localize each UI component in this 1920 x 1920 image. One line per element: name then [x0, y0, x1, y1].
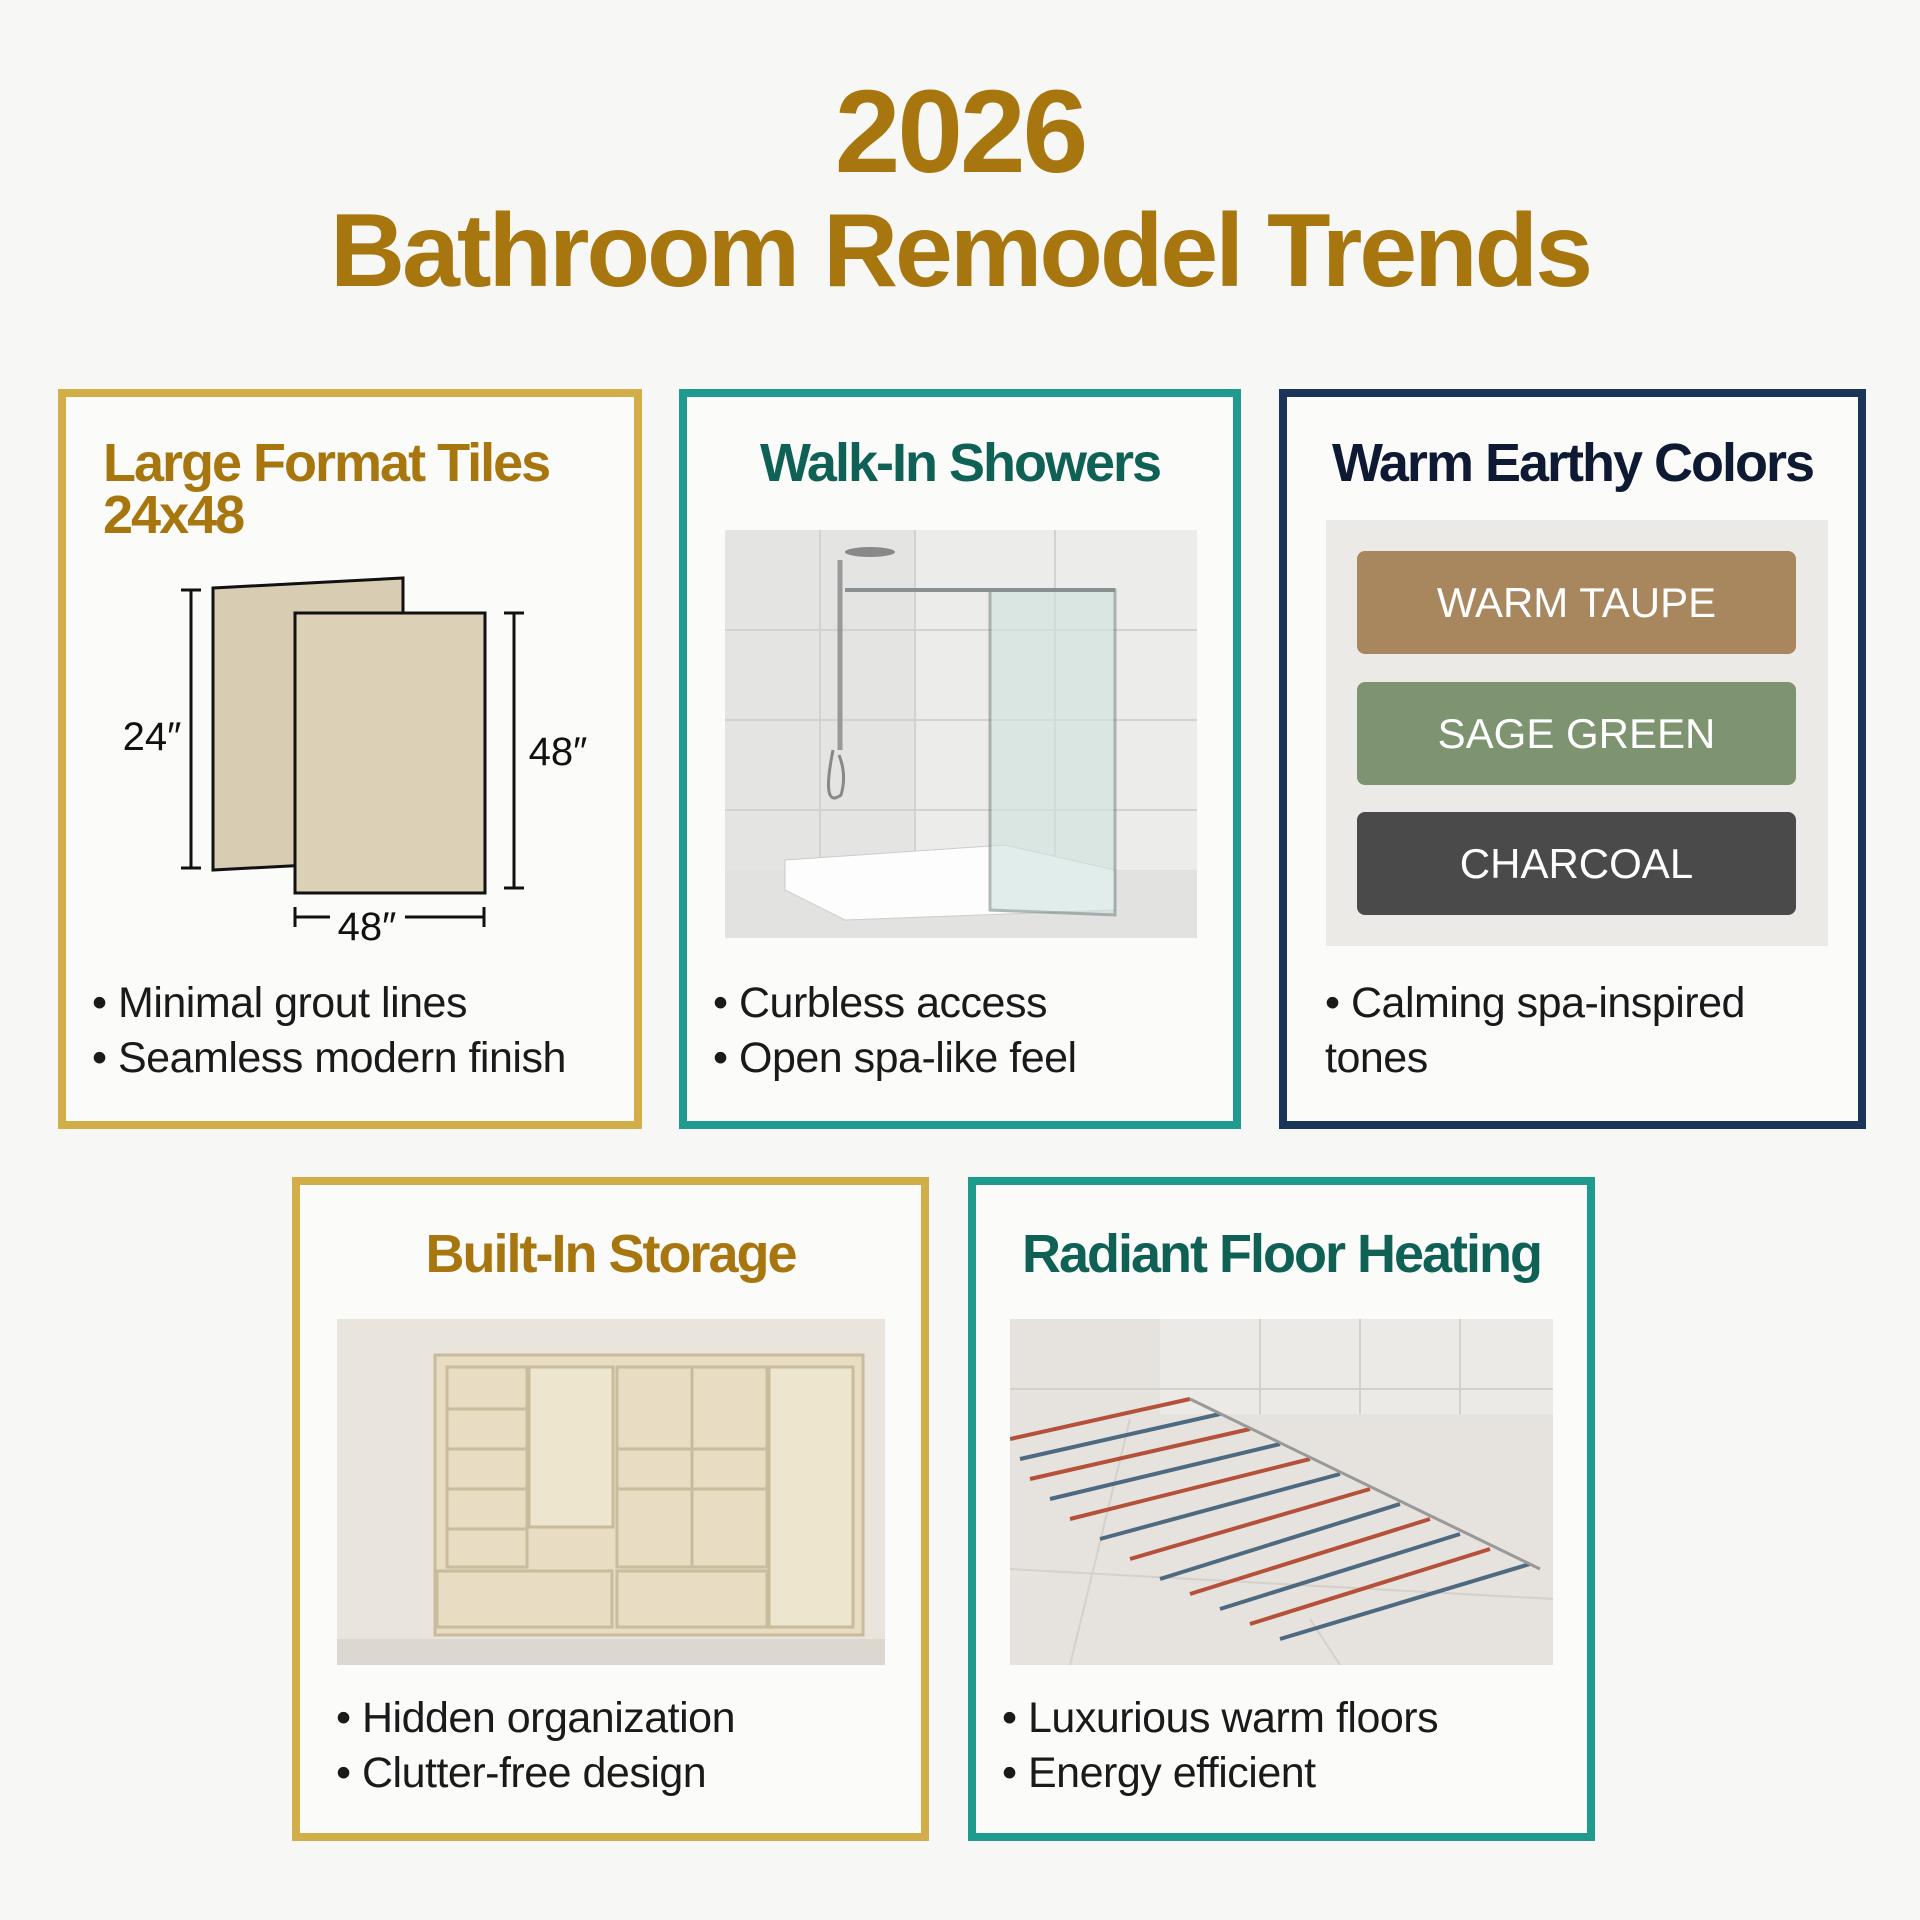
swatch: sage green [1357, 682, 1796, 785]
bullets [713, 979, 1077, 1082]
panel: walk-in showers [679, 389, 1241, 1129]
swatch: charcoal: CHARCOAL [1460, 840, 1693, 887]
shower photo [725, 530, 1197, 938]
bullets: tones [1325, 1034, 1428, 1082]
tile diagram: 24″ [123, 715, 181, 759]
tile diagram: 48″ [338, 905, 396, 949]
bullets: • Clutter-free design [336, 1749, 706, 1797]
heading: Radiant Floor Heating [1022, 1224, 1541, 1284]
bullets [1325, 979, 1745, 1082]
bullets: • Curbless access [713, 979, 1047, 1027]
panel: built-in storage [292, 1177, 929, 1841]
title [330, 66, 1590, 309]
swatch: warm taupe [1357, 551, 1796, 654]
storage photo [337, 1319, 885, 1665]
heating photo [1010, 1319, 1553, 1665]
swatch: charcoal [1357, 812, 1796, 915]
title: Bathroom Remodel Trends [330, 193, 1590, 309]
bullets: • Hidden organization [336, 1694, 735, 1742]
tile diagram: 48″ [529, 730, 587, 774]
bullets [1002, 1694, 1438, 1797]
panel: large format tiles [58, 389, 642, 1129]
heading: Warm Earthy Colors [1332, 433, 1813, 493]
color swatches [1326, 520, 1828, 946]
tile diagram [123, 576, 587, 949]
swatch: sage green: SAGE GREEN [1438, 710, 1715, 757]
bullets: • Seamless modern finish [92, 1034, 566, 1082]
bullets: • Minimal grout lines [92, 979, 467, 1027]
swatch: warm taupe: WARM TAUPE [1437, 579, 1716, 626]
heading: Walk-In Showers [760, 433, 1160, 493]
bullets: • Luxurious warm floors [1002, 1694, 1438, 1742]
heading: Built-In Storage [426, 1224, 796, 1284]
heading: large format tiles: Large Format Tiles [103, 433, 549, 493]
bullets [336, 1694, 735, 1797]
bullets [92, 979, 566, 1082]
title: 2026 [835, 66, 1085, 198]
panel: radiant floor heating [968, 1177, 1595, 1841]
panel: warm earthy colors [1279, 389, 1866, 1129]
heading: large format tiles: 24x48 [103, 485, 243, 545]
bullets: • Open spa-like feel [713, 1034, 1077, 1082]
bullets: • Calming spa-inspired [1325, 979, 1745, 1027]
bullets: • Energy efficient [1002, 1749, 1316, 1797]
heading: large format tiles [103, 433, 549, 545]
